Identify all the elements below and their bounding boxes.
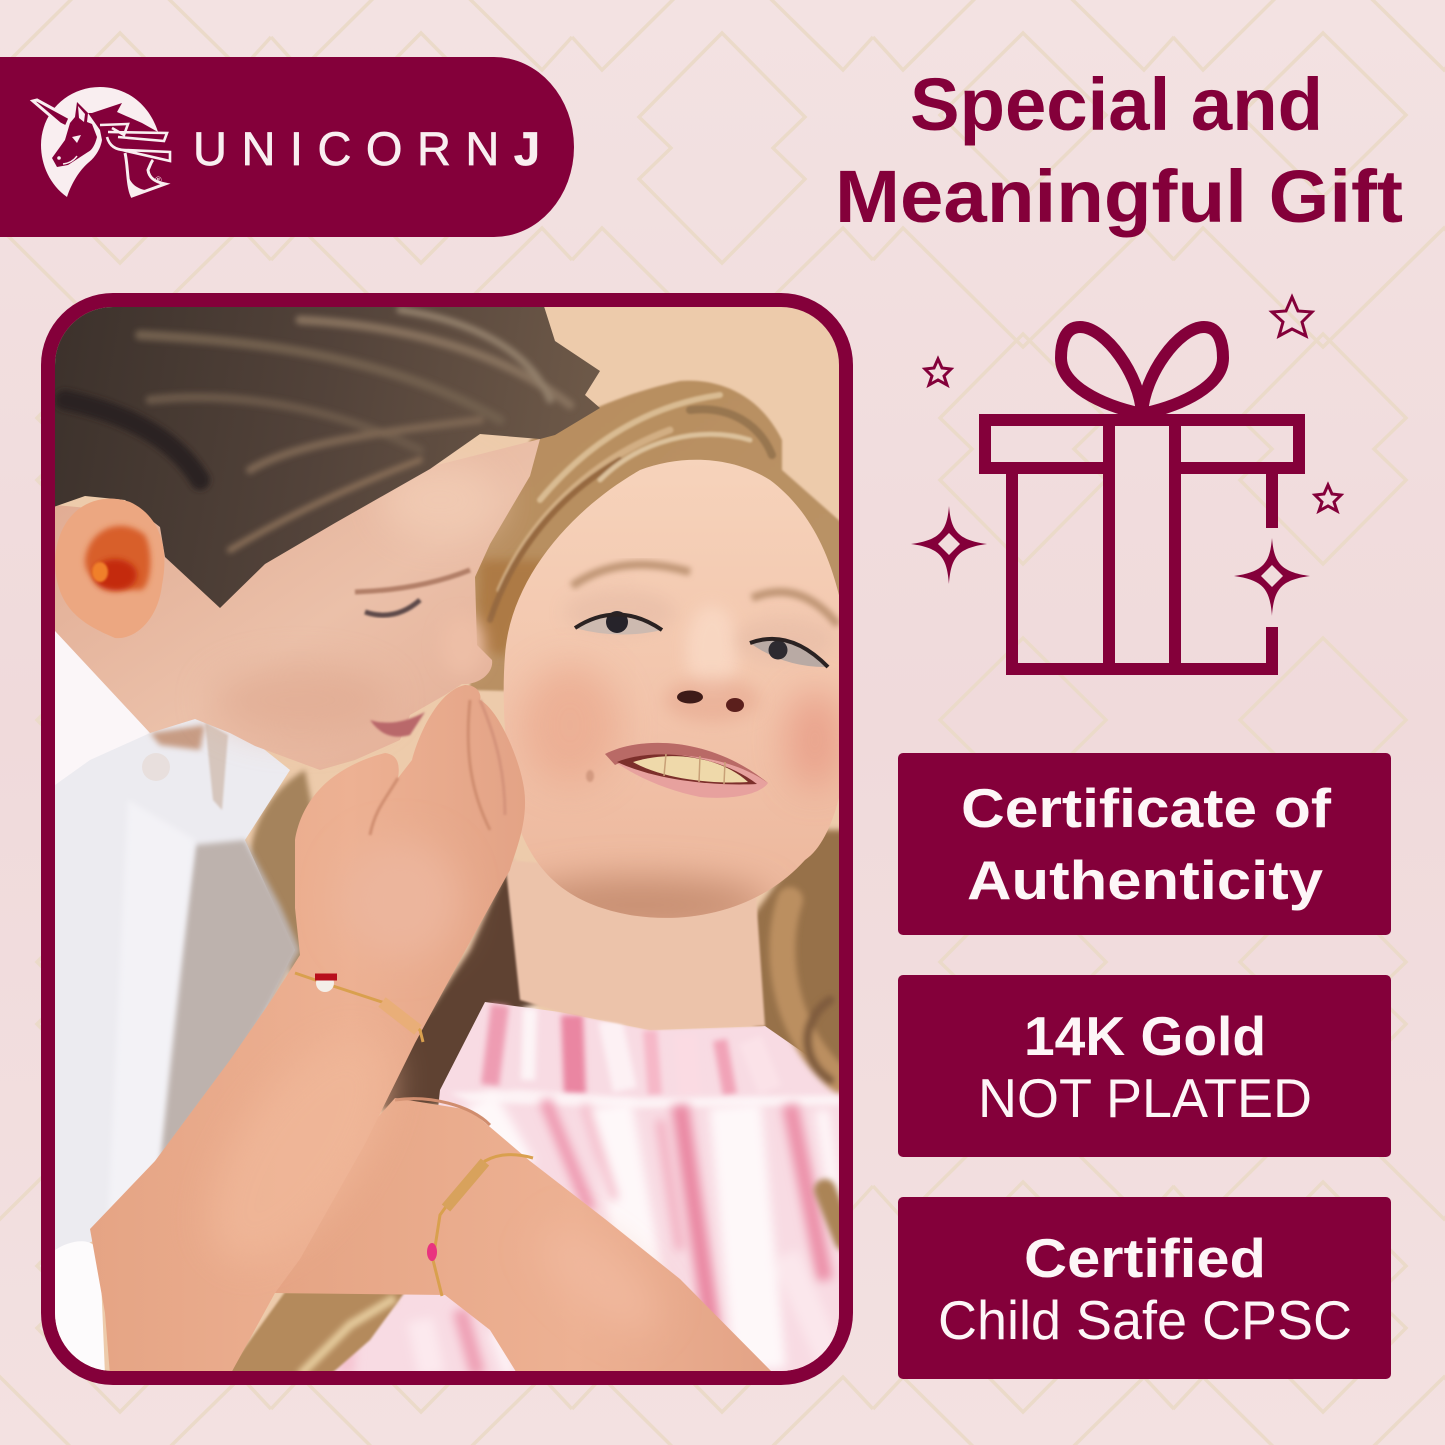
girl back hair: [470, 381, 850, 700]
girl right curls: [782, 900, 845, 1240]
title: Special and: [910, 63, 1323, 146]
boy arm and hand: [90, 685, 525, 1375]
bracelet on boy wrist: [295, 973, 423, 1042]
icon: stars: [925, 297, 1341, 511]
gift body: [1012, 474, 1272, 669]
girl arm: [275, 1098, 775, 1375]
dress: [334, 1000, 839, 1371]
panel: certified child safe: Child Safe CPSC: [938, 1289, 1352, 1351]
gift bow: [1061, 327, 1223, 414]
photo background: [55, 307, 839, 1371]
panel: certificate of authenticity: [898, 753, 1391, 935]
panel: certified child safe: [898, 1197, 1391, 1379]
icon: unicorn head logo: [33, 87, 170, 197]
gift ribbon: [1109, 414, 1175, 675]
panel: certified child safe: Certified: [1024, 1227, 1266, 1289]
cuff: [55, 1241, 105, 1375]
bracelet on girl wrist: [427, 1155, 533, 1296]
gift lid: [985, 420, 1299, 468]
panel: certificate of authenticity: Certificate of: [961, 777, 1332, 839]
shirt: [55, 620, 300, 1375]
title: [835, 63, 1403, 238]
photo panel: boy whispering to girl: [41, 293, 853, 1385]
panel: 14K gold not plated: [898, 975, 1391, 1157]
panel: certificate of authenticity: Authenticity: [967, 849, 1323, 911]
icon: unicorn head logo: ®: [155, 175, 162, 185]
panel: 14K gold not plated: 14K Gold: [1024, 1005, 1266, 1067]
icon: gift box: [985, 327, 1299, 675]
lower blonde hair: [225, 1292, 405, 1375]
panel: 14K gold not plated: NOT PLATED: [978, 1067, 1312, 1129]
nose: [664, 678, 760, 722]
girl lower hair: [248, 768, 314, 973]
title: Meaningful Gift: [835, 155, 1403, 238]
girl neck: [505, 860, 765, 1030]
boy hair: [45, 300, 600, 608]
boy face: [55, 439, 540, 770]
header logo band: [0, 57, 574, 237]
brand name: UNICORN J: [193, 122, 540, 175]
girl face: [504, 460, 850, 933]
eyes and brows: [572, 565, 690, 586]
smile: [618, 744, 768, 798]
boy ear: [55, 499, 164, 638]
icon: sparkles: [911, 506, 1310, 616]
collar: [55, 630, 150, 785]
